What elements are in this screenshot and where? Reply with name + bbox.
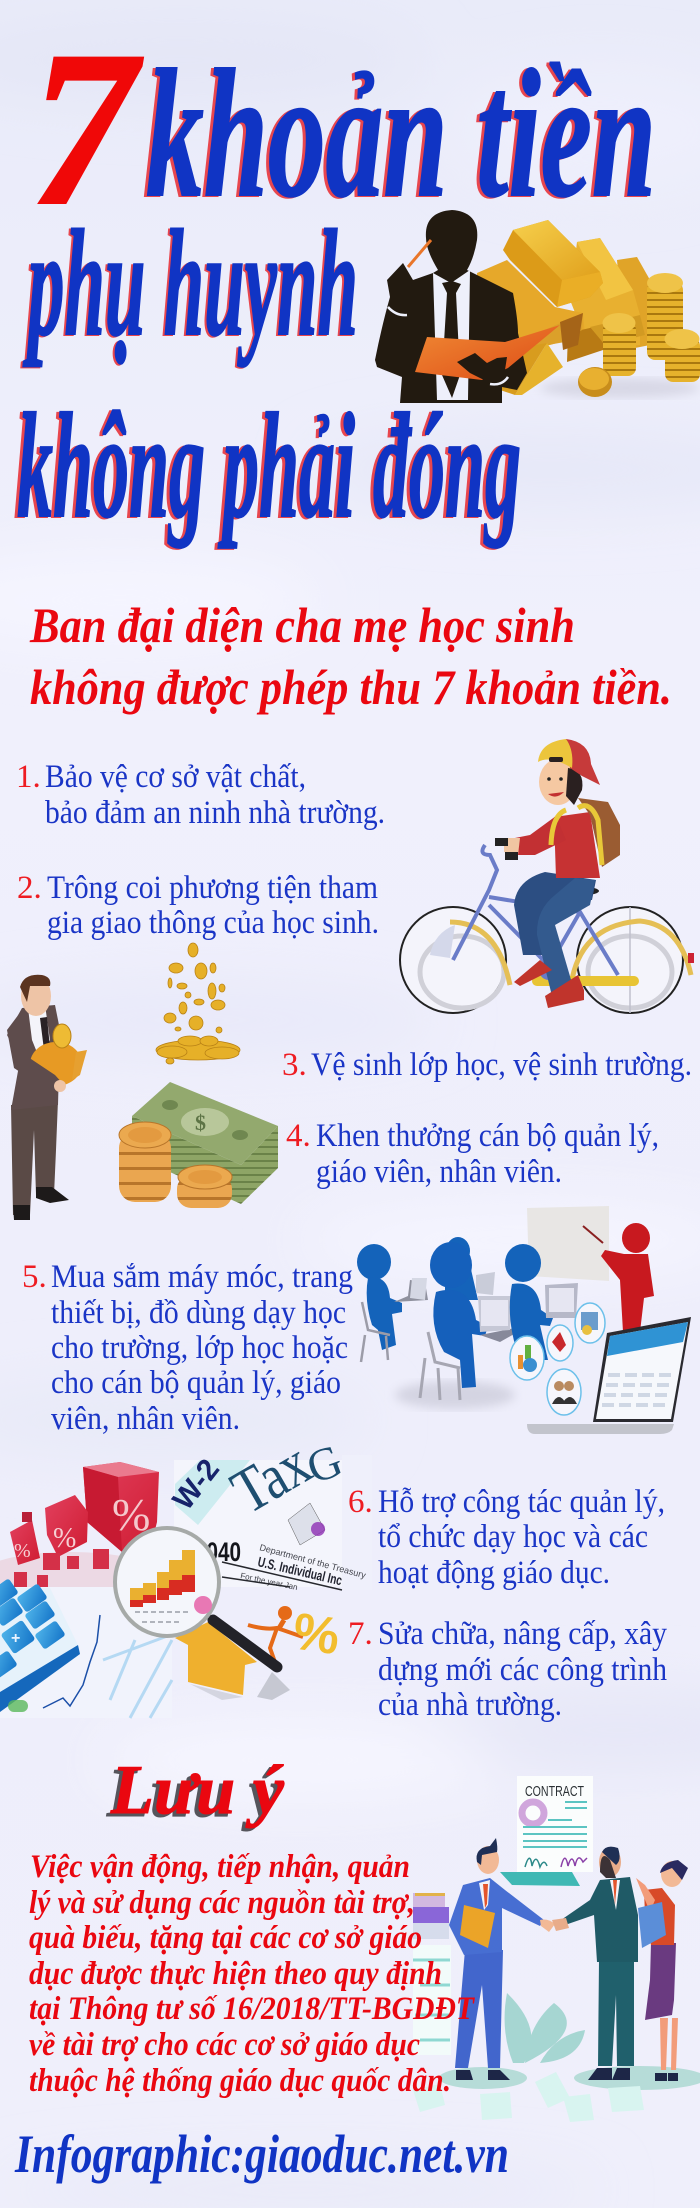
illustration: gold bars and coins — [477, 220, 700, 398]
item 5: cho trường, lớp học hoặc — [51, 1330, 348, 1366]
lower bars — [567, 325, 603, 362]
panel: red percent cubes: % — [53, 1523, 76, 1554]
item 6: Hỗ trợ công tác quản lý, — [378, 1484, 665, 1520]
item 4: giáo viên, nhân viên. — [316, 1154, 562, 1190]
item 4: Khen thưởng cán bộ quản lý, — [316, 1118, 659, 1154]
illustration: man holding piggy bank — [7, 975, 87, 1220]
illustration: business partners shaking hands — [413, 1776, 700, 2122]
heading: Lưu ý: Lưu ý — [106, 1755, 281, 1832]
panel: red percent cubes — [0, 1462, 159, 1592]
item 6: 6. — [348, 1484, 373, 1520]
item 7: dựng mới các công trình — [378, 1652, 667, 1688]
item 7: của nhà trường. — [378, 1687, 562, 1723]
main bar — [503, 220, 603, 307]
item 5: viên, nhân viên. — [51, 1401, 240, 1437]
note text — [29, 1849, 476, 2099]
illustration: falling gold coins — [156, 943, 240, 1064]
presentation board — [527, 1206, 609, 1281]
coin stack small — [177, 1165, 232, 1208]
red presenter — [601, 1223, 654, 1332]
item 2: 2. — [17, 870, 42, 906]
note text: quà biếu, tặng tại các cơ sở giáo — [29, 1920, 422, 1956]
note text: dục được thực hiện theo quy định — [29, 1956, 442, 1992]
magnifier — [115, 1528, 277, 1667]
item 7 — [348, 1616, 667, 1723]
item 3: 3. — [282, 1047, 307, 1083]
contract document: CONTRACT — [525, 1784, 584, 1800]
title — [14, 6, 656, 550]
item 4 — [286, 1118, 659, 1190]
note text: tại Thông tư số 16/2018/TT-BGDĐT — [29, 1991, 476, 2027]
illustration: banknotes and coins: $ — [195, 1110, 206, 1135]
panel: house and percent seesaw — [175, 1602, 343, 1700]
laptop — [527, 1317, 691, 1434]
blue student back center — [445, 1237, 478, 1300]
item 6: tổ chức dạy học và các — [378, 1519, 648, 1555]
front wheel — [400, 907, 506, 1013]
item 5: thiết bị, đồ dùng dạy học — [51, 1295, 346, 1331]
note text: Việc vận động, tiếp nhận, quản — [30, 1849, 410, 1885]
icon bubbles — [510, 1303, 605, 1415]
contract document — [500, 1776, 593, 1886]
illustration: classroom with computers — [357, 1206, 691, 1434]
title number 7: 7 — [30, 6, 144, 252]
item 6 — [348, 1484, 665, 1591]
note text: thuộc hệ thống giáo dục quốc dân. — [29, 2063, 451, 2099]
item 5: Mua sắm máy móc, trang — [51, 1259, 353, 1295]
heading: Lưu ý: Lưu ý — [110, 1752, 285, 1829]
note text: lý và sử dụng các nguồn tài trợ, — [29, 1885, 415, 1921]
rear wheel — [577, 907, 683, 1013]
coin stack large — [119, 1122, 171, 1202]
item 1 — [16, 759, 385, 831]
item 7: Sửa chữa, nâng cấp, xây — [378, 1616, 667, 1652]
panel: tax form: G — [300, 1434, 349, 1493]
plant — [505, 1993, 585, 2063]
item 6: hoạt động giáo dục. — [378, 1555, 610, 1591]
man in teal suit — [552, 1847, 638, 2080]
blue student front — [430, 1242, 488, 1388]
woman with folder — [636, 1860, 688, 2081]
panel: tax form: For the year Jan — [240, 1571, 298, 1592]
paper stack and binders — [413, 1893, 451, 2055]
illustration: student on bicycle — [400, 739, 694, 1013]
panel: tax form: Department of the Treasury — [258, 1542, 367, 1580]
coin stacks — [578, 273, 700, 397]
item 4: 4. — [286, 1118, 311, 1154]
title: phụ huynh — [21, 200, 356, 368]
ground ellipses — [439, 2066, 700, 2090]
panel: red percent cubes: % — [14, 1540, 31, 1562]
panel: tax form: Tax — [220, 1427, 322, 1527]
subtitle line 1: Ban đại diện cha mẹ học sinh — [29, 597, 575, 653]
blue student back left — [357, 1244, 402, 1350]
item 5: cho cán bộ quản lý, giáo — [51, 1365, 341, 1401]
item 5: 5. — [22, 1259, 47, 1295]
illustration: businessman silhouette with folder — [375, 210, 560, 403]
panel: calculator and chart — [0, 1578, 172, 1718]
man in blue suit — [449, 1838, 555, 2080]
item 5 — [22, 1259, 353, 1437]
panel: red percent cubes: % — [112, 1489, 150, 1540]
panel: tax form: 1040 — [195, 1537, 241, 1567]
panel: calculator and chart: + — [11, 1630, 20, 1647]
item 2: Trông coi phương tiện tham — [47, 870, 378, 906]
item 1: Bảo vệ cơ sở vật chất, — [45, 759, 306, 795]
item 1: bảo đảm an ninh nhà trường. — [45, 795, 385, 831]
item 7: 7. — [348, 1616, 373, 1652]
bars behind — [617, 257, 650, 350]
panel: tax form: W-2 — [167, 1453, 226, 1516]
subtitle — [29, 597, 672, 715]
blue student right — [505, 1244, 553, 1360]
illustration: finance and tax collage — [0, 1427, 372, 1718]
title line 2 — [21, 199, 358, 368]
item 2: gia giao thông của học sinh. — [47, 905, 379, 941]
title: phụ huynh — [23, 199, 358, 367]
panel: tax form — [167, 1427, 372, 1592]
note text: về tài trợ cho các cơ sở giáo dục — [29, 2027, 420, 2063]
floating papers — [413, 2072, 644, 2122]
illustration: banknotes and coins — [119, 1082, 278, 1208]
footer credit: Infographic:giaoduc.net.vn — [14, 2124, 509, 2184]
item 1: 1. — [16, 759, 41, 795]
item 2 — [17, 870, 379, 941]
panel: house and percent seesaw: % — [289, 1602, 343, 1666]
rider — [495, 739, 620, 1008]
panel: tax form: U.S. Individual Inc — [256, 1553, 344, 1588]
